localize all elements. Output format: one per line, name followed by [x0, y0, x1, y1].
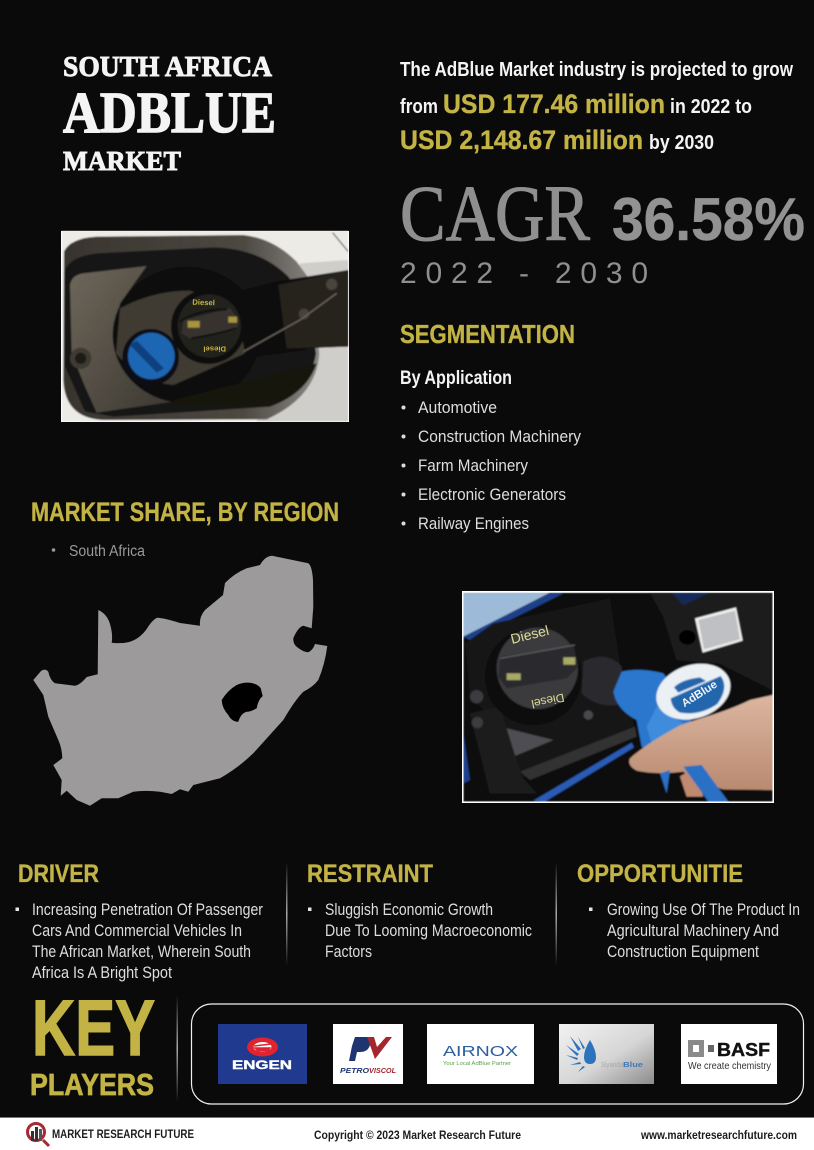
black diesel cap	[171, 289, 246, 364]
nozzle neck	[582, 657, 623, 705]
segmentation list: Farm Machinery	[418, 456, 528, 475]
logo: Petroviscol: PETRO	[340, 1068, 370, 1075]
outer recess	[63, 235, 319, 420]
driver column: The African Market, Wherein South	[32, 942, 251, 961]
projection text: from	[400, 96, 438, 118]
blue nozzle	[613, 670, 693, 753]
Lesotho	[222, 683, 263, 722]
hinge arm	[237, 270, 348, 358]
key players heading: KEY	[32, 983, 155, 1072]
projection text	[400, 59, 793, 155]
title	[63, 52, 276, 176]
segmentation heading: SEGMENTATION	[400, 319, 575, 349]
logo: Petroviscol	[333, 1024, 403, 1084]
footer: MARKET RESEARCH FUTURE	[52, 1127, 194, 1141]
restraint column: Factors	[325, 942, 372, 961]
title: ADBLUE	[63, 80, 276, 145]
driver column	[16, 860, 263, 982]
restraint heading: RESTRAINT	[307, 860, 433, 888]
title: MARKET	[63, 146, 181, 176]
title: SOUTH AFRICA	[63, 52, 273, 83]
driver heading: DRIVER	[18, 860, 99, 888]
map: South Africa	[33, 556, 327, 806]
logo: Airnox	[427, 1024, 534, 1084]
footer: Copyright © 2023 Market Research Future	[314, 1128, 521, 1142]
dark opening	[113, 267, 261, 403]
photo: AdBlue nozzle: AdBlue	[680, 679, 720, 710]
photo: AdBlue nozzle: Diesel	[530, 690, 566, 711]
CAGR: 36.58%	[612, 186, 805, 253]
projection text: by 2030	[649, 132, 714, 154]
logo: SiyandaBlue: Siyanda	[601, 1060, 624, 1069]
logo: SiyandaBlue: Blue	[623, 1060, 643, 1069]
photo: AdBlue nozzle	[462, 591, 774, 803]
logo: BASF	[681, 1024, 777, 1084]
key players heading: PLAYERS	[30, 1067, 154, 1102]
footer logo icon	[28, 1124, 49, 1146]
key players panel	[192, 1004, 804, 1104]
opportunity column: Agricultural Machinery And	[607, 921, 779, 940]
logo: Petroviscol: VISCOL	[369, 1068, 396, 1075]
hand	[629, 695, 773, 790]
segmentation list: Electronic Generators	[418, 485, 566, 504]
segmentation list	[400, 368, 581, 533]
CAGR: CAGR	[400, 171, 590, 258]
nozzle badge	[655, 662, 732, 721]
blue adblue cap	[122, 329, 179, 386]
sticker	[695, 607, 743, 653]
restraint column	[307, 860, 532, 961]
photo: fuel filler caps: Diesel	[203, 345, 226, 354]
diesel cap	[485, 628, 582, 725]
CAGR: 2022 - 2030	[400, 257, 648, 290]
projection text: USD 2,148.67 million	[400, 125, 643, 155]
segmentation list: Automotive	[418, 398, 497, 417]
logo: BASF: We create chemistry	[688, 1061, 771, 1072]
projection text: USD 177.46 million	[443, 89, 665, 119]
logo: Engen	[218, 1024, 307, 1084]
logo: BASF: BASF	[717, 1040, 770, 1060]
recess	[465, 598, 637, 777]
key players heading	[30, 983, 155, 1102]
driver column: Africa Is A Bright Spot	[32, 963, 172, 982]
logo: Airnox: AIRNOX	[443, 1043, 518, 1060]
restraint column: Sluggish Economic Growth	[325, 900, 493, 919]
opportunity column: Construction Equipment	[607, 942, 759, 961]
restraint column: Due To Looming Macroeconomic	[325, 921, 532, 940]
opportunity heading: OPPORTUNITIE	[577, 860, 743, 888]
logo: Airnox: Your Local AdBlue Partner	[443, 1061, 511, 1067]
footer	[0, 1117, 814, 1150]
projection text: in 2022 to	[670, 96, 752, 118]
segmentation list: By Application	[400, 368, 512, 389]
photo: AdBlue nozzle: Diesel	[509, 622, 550, 647]
photo: fuel filler caps	[61, 231, 349, 422]
driver column: Increasing Penetration Of Passenger	[32, 900, 263, 919]
segmentation list: Construction Machinery	[418, 427, 581, 446]
CAGR	[400, 171, 805, 290]
logo: Engen: ENGEN	[232, 1058, 292, 1072]
driver column: Cars And Commercial Vehicles In	[32, 921, 242, 940]
map legend: South Africa	[69, 543, 145, 560]
opportunity column	[577, 860, 800, 961]
market share heading: MARKET SHARE, BY REGION	[31, 497, 339, 527]
photo: fuel filler caps: Diesel	[192, 298, 215, 307]
logo: SiyandaBlue	[559, 1024, 654, 1084]
segmentation list: Railway Engines	[418, 514, 529, 533]
